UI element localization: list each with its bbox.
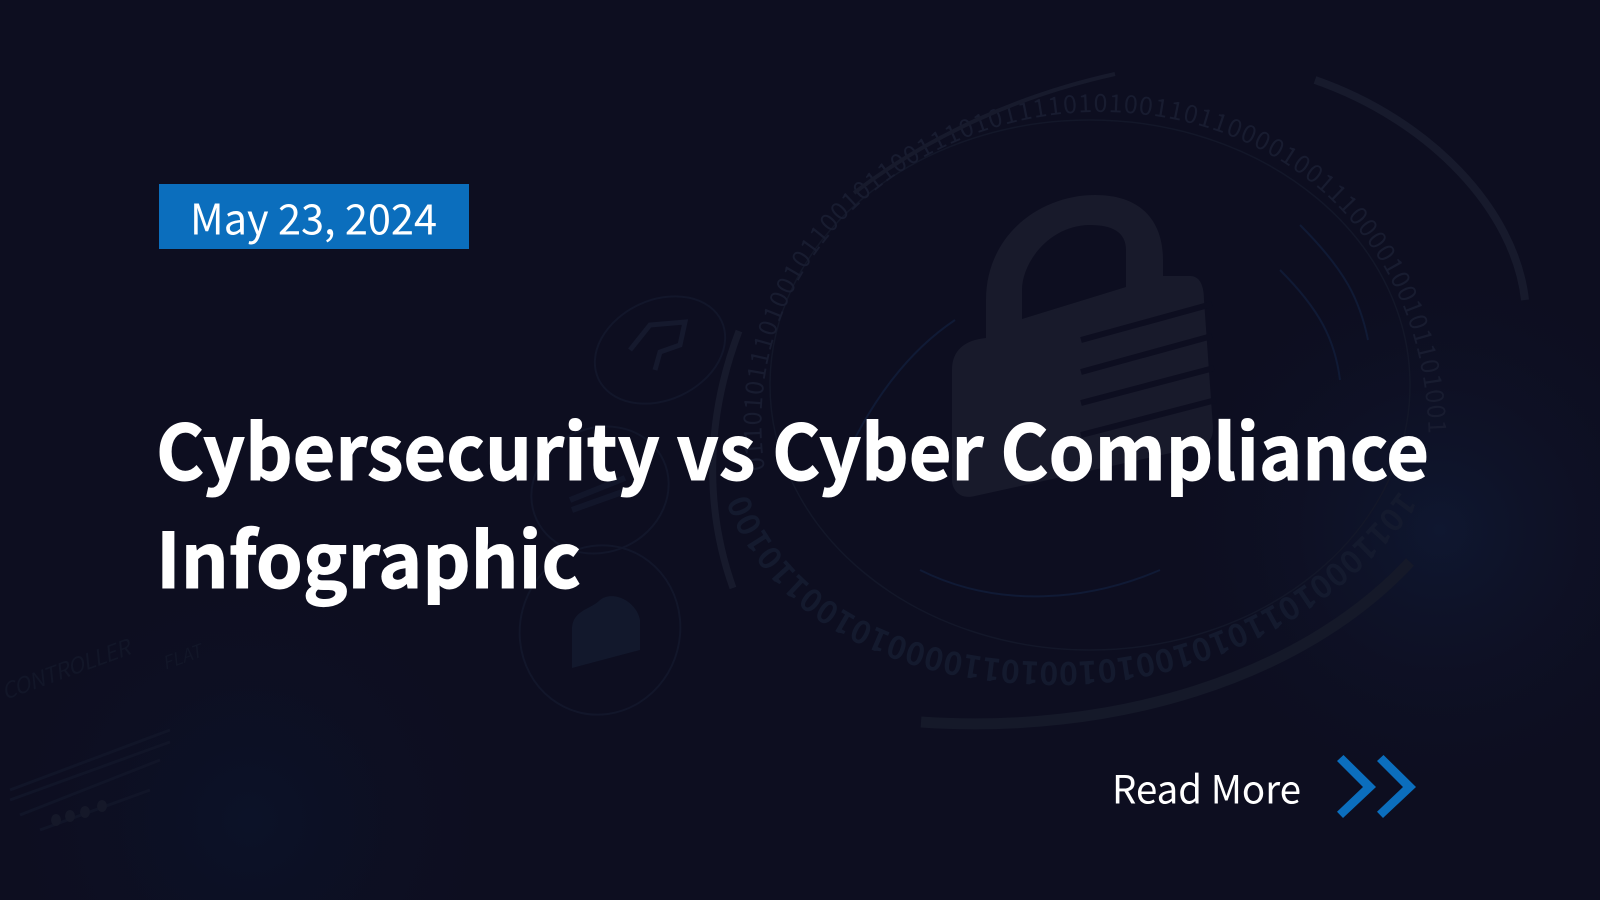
brain icon [577,276,743,424]
title [156,392,1429,610]
background: faint dashboard lines and dots [10,730,170,830]
read more link [1112,755,1416,818]
background: padlock icon [952,195,1216,497]
title: Infographic [156,500,581,610]
cloud lock icon [501,527,699,733]
icon: double chevron arrow [1337,755,1416,818]
background: blue circuit traces [840,225,1368,596]
date text: May 23, 2024 [190,186,437,248]
title: Cybersecurity vs Cyber Compliance [156,392,1429,502]
date badge [159,184,469,249]
read more link: Read More [1112,760,1301,816]
background: thick arcs [713,74,1525,724]
background: binary security ring: 011010111010010110010110011101011110101001101100001001110000100101101001 [744,94,1446,470]
background: faint controller labels [0,629,208,707]
background: faint controller labels: FLAT [158,636,208,676]
background: faint circular icons [501,276,743,733]
background: binary security ring [728,94,1446,686]
chip icon [510,404,690,576]
padlock stripes [1081,304,1216,435]
background: faint controller labels: CONTROLLER [0,629,137,707]
